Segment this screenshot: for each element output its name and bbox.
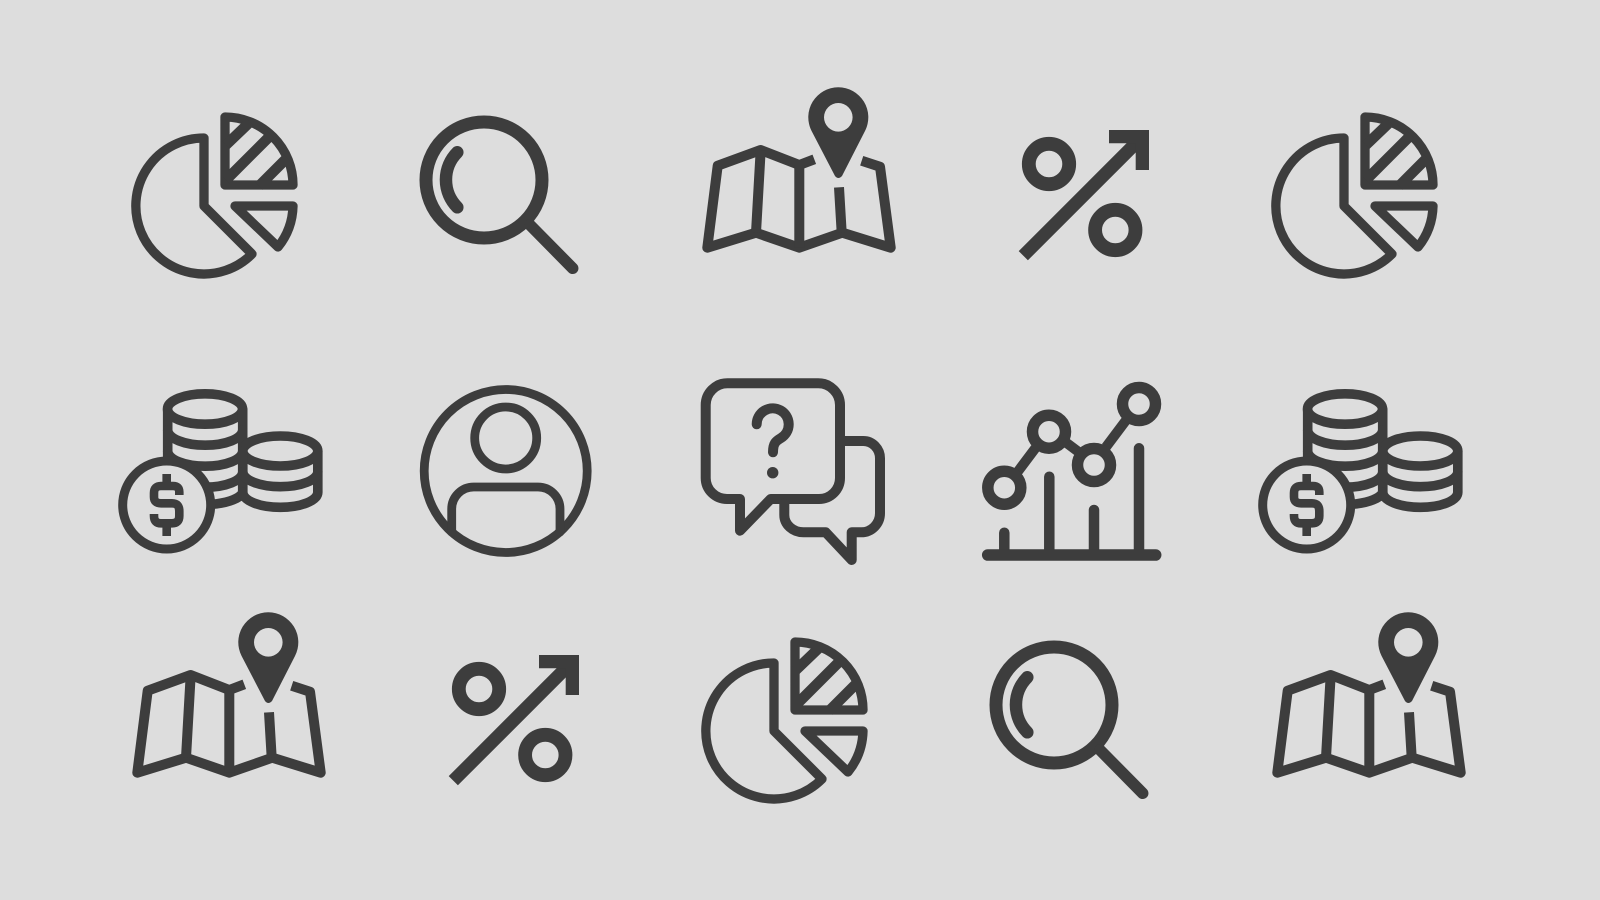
icon: pie chart, row 1 [136, 117, 293, 274]
icon: speech bubbles with question mark [706, 383, 880, 560]
icon: line and bar growth chart [988, 388, 1156, 555]
icon: percent with rising arrow, row 3 [453, 655, 579, 781]
icon: coin stacks with dollar, row 2 right [1263, 394, 1458, 549]
icon: pie chart, row 1 right [1276, 117, 1433, 274]
icon: percent with rising arrow, row 1 [1023, 130, 1149, 256]
icon: magnifying glass, row 3 [996, 647, 1143, 793]
icon: folded map with location pin, row 1 [707, 87, 891, 248]
icon: question mark dot [767, 467, 778, 478]
icon: magnifying glass, row 1 [426, 122, 573, 268]
icon: folded map with location pin, row 3 right [1277, 612, 1461, 773]
icon: coin stacks with dollar, row 2 [123, 394, 318, 549]
icon: user profile in circle [424, 390, 587, 552]
icon: pie chart, row 3 [706, 642, 863, 799]
icon: folded map with location pin, row 3 left [137, 612, 321, 773]
